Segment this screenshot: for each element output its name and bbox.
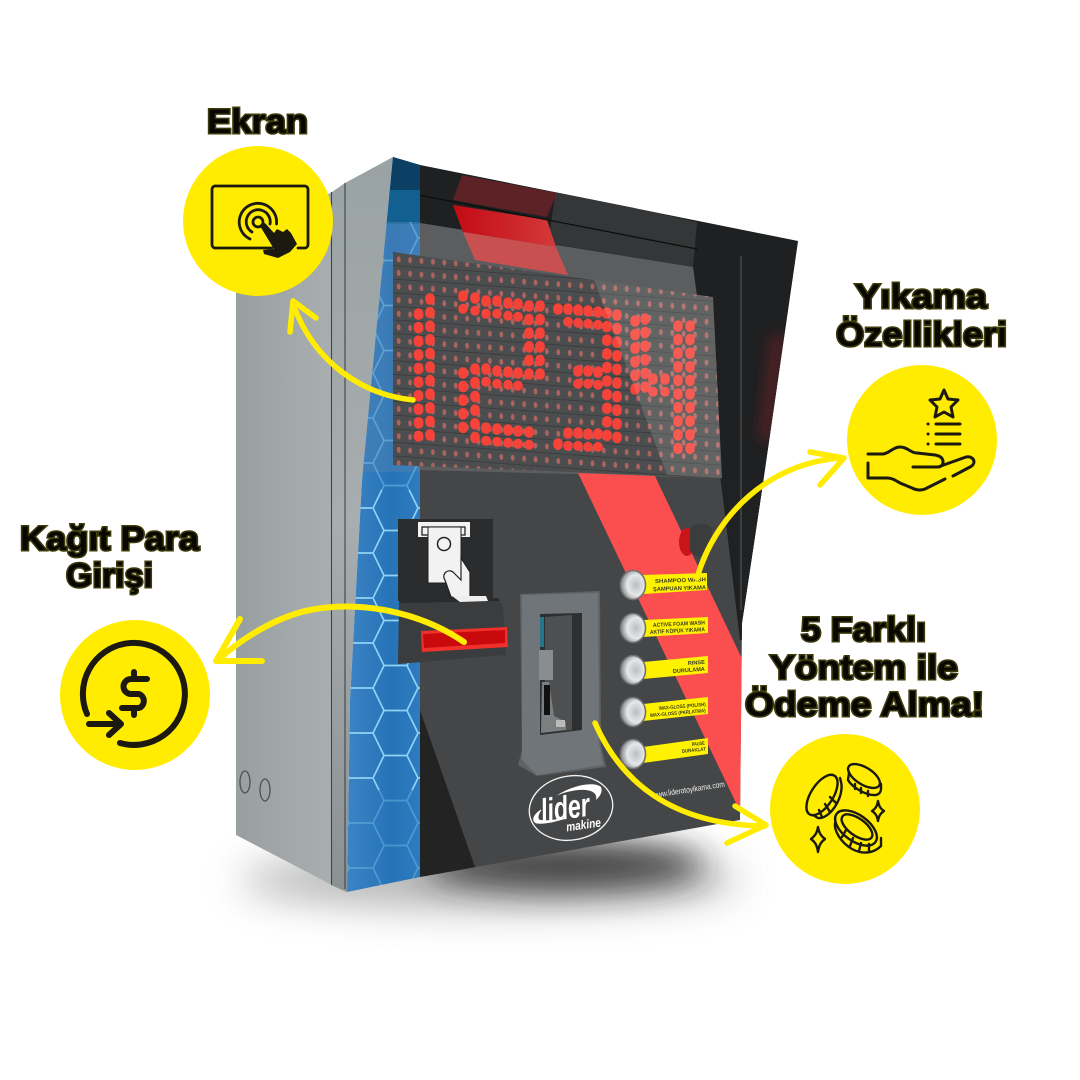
circle: Kağıt Para bbox=[60, 620, 210, 770]
logo: lider makine: lider bbox=[538, 786, 593, 829]
red LED digits bbox=[418, 295, 690, 452]
start buttons and labels bbox=[620, 570, 708, 768]
circle: payment bbox=[770, 734, 920, 884]
icon: hand with star and list bbox=[868, 390, 974, 490]
label: shampoo wash: ŞAMPUAN YIKAMA bbox=[653, 585, 706, 593]
lower red stripe bbox=[578, 473, 745, 815]
cable holes bbox=[240, 771, 270, 801]
machine: payment unit bbox=[236, 150, 805, 900]
heading: Yıkama Özellikleri: Yıkama bbox=[855, 278, 988, 316]
label: rinse bbox=[643, 656, 708, 679]
label: wax gloss: WAX-GLOSS (POLISH) bbox=[659, 702, 706, 712]
circle: Yıkama bbox=[847, 365, 997, 515]
callout: 5 Farklı Yöntem ile Ödeme Alma bbox=[745, 611, 984, 884]
floor shadow bbox=[240, 841, 740, 908]
red bill slot bbox=[421, 627, 508, 652]
upper red stripe bbox=[453, 175, 568, 275]
label: active foam bbox=[643, 617, 708, 637]
icon: dollar with arrow bbox=[83, 643, 185, 745]
hood side dark bbox=[742, 480, 764, 622]
label: shampoo wash bbox=[643, 573, 707, 594]
website text: www.liderotoyikama.com bbox=[651, 780, 726, 800]
arrow: display to Ekran bbox=[290, 301, 413, 400]
callout: Yıkama Özellikleri bbox=[836, 278, 1007, 515]
heading: 5 Farklı Yöntem ile Ödeme Alma: 5 Farklı bbox=[801, 611, 926, 649]
glass reflection bbox=[594, 280, 722, 478]
icon: coins bbox=[800, 759, 884, 853]
logo: lider makine bbox=[524, 769, 618, 847]
bill acceptor bbox=[398, 519, 508, 664]
heading: Kağıt Para Girişi bbox=[20, 520, 200, 595]
emergency knob bbox=[679, 524, 712, 556]
heading: Kağıt Para Girişi: Kağıt Para bbox=[20, 520, 200, 558]
LED display bbox=[393, 252, 722, 478]
icon: touch screen bbox=[212, 186, 308, 258]
label: shampoo wash: SHAMPOO WASH bbox=[655, 577, 706, 585]
label: active foam: ACTIVE FOAM WASH bbox=[653, 620, 705, 629]
side panel bbox=[236, 157, 393, 892]
label: rinse: DURULAMA bbox=[673, 667, 705, 675]
arrow: buttons to Yıkama Özellikleri bbox=[697, 452, 844, 578]
callout: Ekran bbox=[183, 103, 333, 296]
label: active foam: AKTİF KÖPÜK YIKAMA bbox=[650, 626, 705, 636]
heading: Kağıt Para Girişi: Girişi bbox=[66, 557, 153, 595]
circle: Ekran bbox=[183, 146, 333, 296]
label: wax gloss bbox=[643, 697, 708, 721]
glass band bbox=[420, 223, 722, 478]
label: rinse: RINSE bbox=[688, 660, 705, 667]
heading: 5 Farklı Yöntem ile Ödeme Alma bbox=[745, 611, 984, 724]
label: pause: DURAKLAT bbox=[682, 747, 706, 755]
heading: 5 Farklı Yöntem ile Ödeme Alma: Yöntem ile bbox=[770, 649, 958, 687]
arrow: coin slot to payment bbox=[595, 723, 766, 843]
callout: Kağıt Para Girişi bbox=[20, 520, 210, 770]
icon: banknote insert bbox=[418, 522, 470, 597]
coin slot window bbox=[539, 613, 582, 735]
front panel bbox=[393, 160, 805, 880]
push buttons bbox=[620, 570, 646, 768]
heading: Ekran: Ekran bbox=[207, 103, 308, 141]
label: pause bbox=[643, 738, 708, 763]
arrow: bill slot to Kağıt Para Girişi bbox=[216, 607, 464, 661]
logo: lider makine: makine bbox=[565, 816, 602, 834]
blue honeycomb strip bbox=[347, 157, 420, 892]
heading: Yıkama Özellikleri bbox=[836, 278, 1007, 354]
heading: 5 Farklı Yöntem ile Ödeme Alma: Ödeme Alma! bbox=[745, 686, 984, 724]
coin module bbox=[518, 591, 606, 776]
heading: Yıkama Özellikleri: Özellikleri bbox=[836, 316, 1007, 354]
label: wax gloss: WAX-GLOSS (PARLATMA) bbox=[650, 708, 706, 719]
dark floor wedge bbox=[420, 710, 475, 880]
label: pause: PAUSE bbox=[692, 741, 706, 748]
